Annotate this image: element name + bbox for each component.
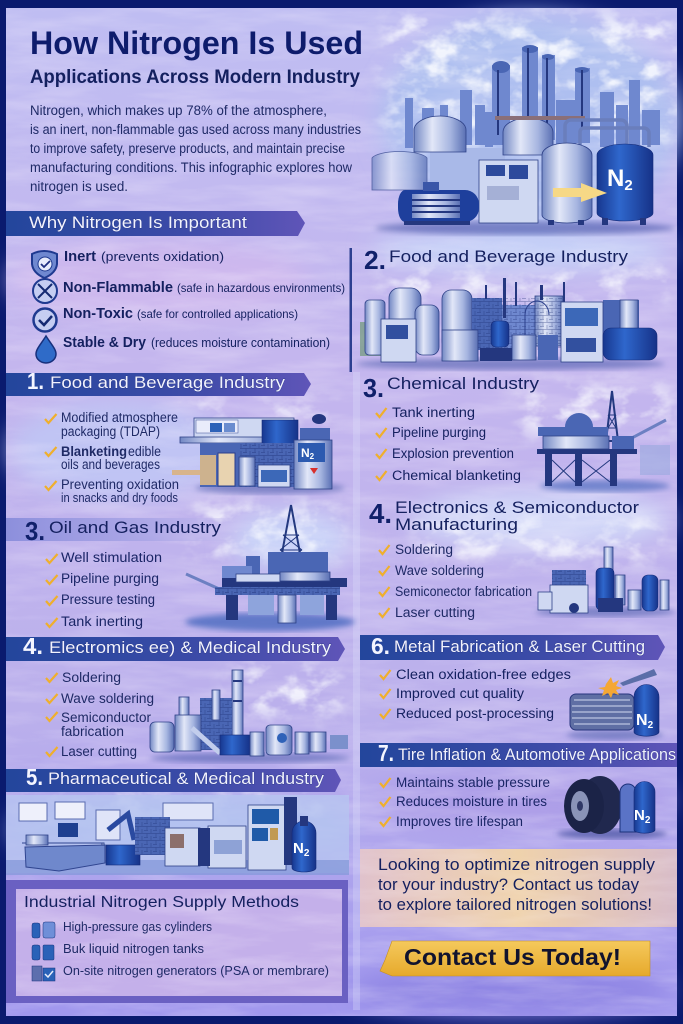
list: tire uses: Improves tire lifespan [396,814,523,829]
banner: 4 electronics and medical: 4. [23,633,43,659]
intro paragraph: nitrogen is used. [30,179,128,194]
intro paragraph: is an inert, non-flammable gas used across many industries [30,122,361,137]
list: chemical uses [376,405,521,483]
list: food and beverage uses: oils and beverages [61,457,160,472]
N2 cylinder label: 2 [304,848,310,859]
item: inert: (prevents oxidation) [101,249,224,264]
N2 label on machine: N [301,446,310,460]
list: tire uses: Reduces moisture in tires [396,794,547,809]
heading: 2 food and beverage [364,245,629,275]
panel: supply methods [6,880,348,1003]
banner: why nitrogen is important [6,211,305,236]
list: chemical uses: Pipeline purging [392,425,486,440]
banner: 1 food and beverage: 1. [27,368,44,394]
hero illustration: nitrogen plant with N2 tank [372,45,675,235]
item: stable and dry: Stable & Dry [63,335,146,351]
illustration: offshore oil platform [185,505,355,631]
banner: 6 metal fabrication: Metal Fabrication & Laser Cutting [394,637,645,656]
N2 tank label: N [607,165,624,192]
heading: 3 chemical: 3. [363,373,384,403]
list: food and beverage uses: Blanketing [61,444,127,459]
heading: 3 chemical [363,373,540,403]
banner: 6 metal fabrication [360,633,665,660]
list: oil and gas uses: Pressure testing [61,592,155,607]
heading: 3 chemical: Chemical Industry [387,374,540,393]
list: oil and gas uses: Tank inerting [61,614,143,629]
N2 label on machine: 2 [310,452,315,461]
icon: shield [32,251,57,278]
N2 tank label: 2 [624,177,633,194]
list: tire uses: Maintains stable pressure [396,775,550,790]
intro paragraph: manufacturing conditions. This infographic explores how [30,160,352,175]
icon: gas cylinders [32,922,55,938]
intro paragraph: Nitrogen, which makes up 78% of the atmosphere, [30,103,327,118]
illustration: electronics plant [150,670,350,763]
item: non-toxic: (safe for controlled applications) [137,307,298,321]
list: metal fabrication uses: Reduced post-processing [396,706,554,721]
list: chemical uses: Chemical blanketing [392,468,521,483]
list: electronics uses: Soldering [62,670,121,685]
list: food and beverage uses: in snacks and dry foods [61,491,178,505]
method: tanks: Buk liquid nitrogen tanks [63,941,204,956]
illustration: tires and N2 cylinders [557,776,667,839]
item: non-flammable: Non-Flammable [63,280,173,296]
list: electronics uses [46,670,154,759]
callout: contact prompt: Looking to optimize nitrogen supply [378,856,656,874]
banner: why nitrogen is important: Why Nitrogen Is Important [29,213,247,232]
banner: 3 oil and gas [6,516,251,546]
subtitle: Applications Across Modern Industry [30,67,360,88]
heading: 4 electronics and semiconductor [369,498,639,534]
illustration: chemical platform [537,391,670,492]
list: food and beverage uses [45,410,179,505]
method: cylinders: High-pressure gas cylinders [63,919,212,934]
intro paragraph [30,103,361,194]
illustration: semiconductor plant [535,547,675,617]
illustration: pharmaceutical lab with N2 cylinder [6,795,349,875]
button: contact us today [380,941,650,976]
callout: contact prompt: to explore tailored nitrogen solutions! [378,896,652,914]
list: semiconductor uses: Soldering [395,542,453,557]
heading: 2 food and beverage: 2. [364,245,386,275]
icon: liquid tanks [32,945,54,960]
callout: contact prompt: tor your industry? Contact us today [378,876,640,894]
N2 cylinder label: 2 [648,720,654,731]
banner: 1 food and beverage: Food and Beverage Industry [50,373,286,392]
list: metal fabrication uses: Improved cut quality [396,686,524,701]
N2 cylinder label: N [636,712,648,729]
item: non-toxic: Non-Toxic [63,306,133,322]
heading: 4 electronics and semiconductor: 4. [369,498,392,529]
list: electronics uses: Laser cutting [61,744,137,759]
N2 cylinder label: N [293,840,304,857]
callout: contact prompt [360,849,677,927]
illustration: packaging machine [172,414,345,494]
heading: 2 food and beverage: Food and Beverage Industry [389,247,629,266]
illustration: food and beverage plant [355,278,665,370]
banner: 4 electronics and medical: Electromics ee) & Medical Industry [49,638,332,657]
icon: generator [32,966,55,981]
banner: 5 pharmaceutical and medical: Pharmaceutical & Medical Industry [48,769,325,788]
list: food and beverage uses: Preventing oxidation [61,477,179,492]
banner: 3 oil and gas: Oil and Gas Industry [49,518,222,537]
arrow into N2 tank [553,183,607,202]
intro paragraph: to improve safety, preserve products, and maintain precise [30,141,345,156]
item: inert: Inert [64,249,96,265]
banner: 5 pharmaceutical and medical [6,764,341,792]
icon: no flame [33,279,57,303]
banner: 7 tire inflation [360,740,677,767]
N2 cylinder label: 2 [645,815,651,826]
icon: check circle [34,308,56,332]
list: semiconductor uses: Semiconector fabrication [395,584,532,599]
list: electronics uses: Semiconductor [61,710,152,725]
banner: 5 pharmaceutical and medical: 5. [26,764,43,790]
list: tire uses [380,775,550,829]
list: food and beverage uses: Modified atmosphere [61,410,178,425]
panel: why nitrogen properties [32,249,345,363]
icon: water drop [36,336,56,363]
list: metal fabrication uses [380,667,571,721]
list: electronics uses: Wave soldering [61,691,154,706]
method: generators: On-site nitrogen generators (PSA or membrare) [63,963,329,978]
illustration: laser cutter and N2 cylinder [567,669,663,740]
list: metal fabrication uses: Clean oxidation-free edges [396,667,571,682]
list: semiconductor uses: Wave soldering [395,563,484,578]
list: food and beverage uses: edible [128,444,161,459]
banner: 7 tire inflation: Tire Inflation & Automotive Applications [398,745,676,764]
banner: 6 metal fabrication: 6. [371,633,390,659]
title: How Nitrogen Is Used [30,25,363,61]
item: stable and dry: (reduces moisture contamination) [151,336,330,350]
banner: 4 electronics and medical [6,633,345,661]
heading: 4 electronics and semiconductor: Electronics & Semiconductor [395,498,639,517]
list: semiconductor uses [379,542,532,620]
list: semiconductor uses: Laser cutting [395,605,475,620]
list: food and beverage uses: packaging (TDAP) [61,424,160,439]
column divider [350,248,352,372]
heading: supply methods: Industrial Nitrogen Supply Methods [24,894,299,911]
list: electronics uses: fabrication [61,724,124,739]
list: oil and gas uses: Pipeline purging [61,571,159,586]
item: non-flammable: (safe in hazardous environments) [177,281,345,295]
button: contact us today: Contact Us Today! [404,944,621,970]
heading: 4 electronics and semiconductor: Manufacturing [395,515,518,534]
list: oil and gas uses [46,550,162,629]
banner: 7 tire inflation: 7. [378,740,394,766]
list: oil and gas uses: Well stimulation [61,550,162,565]
N2 cylinder label: N [634,807,645,824]
list: chemical uses: Tank inerting [392,405,475,420]
banner: 3 oil and gas: 3. [25,516,45,546]
list: chemical uses: Explosion prevention [392,446,514,461]
banner: 1 food and beverage [6,368,311,396]
